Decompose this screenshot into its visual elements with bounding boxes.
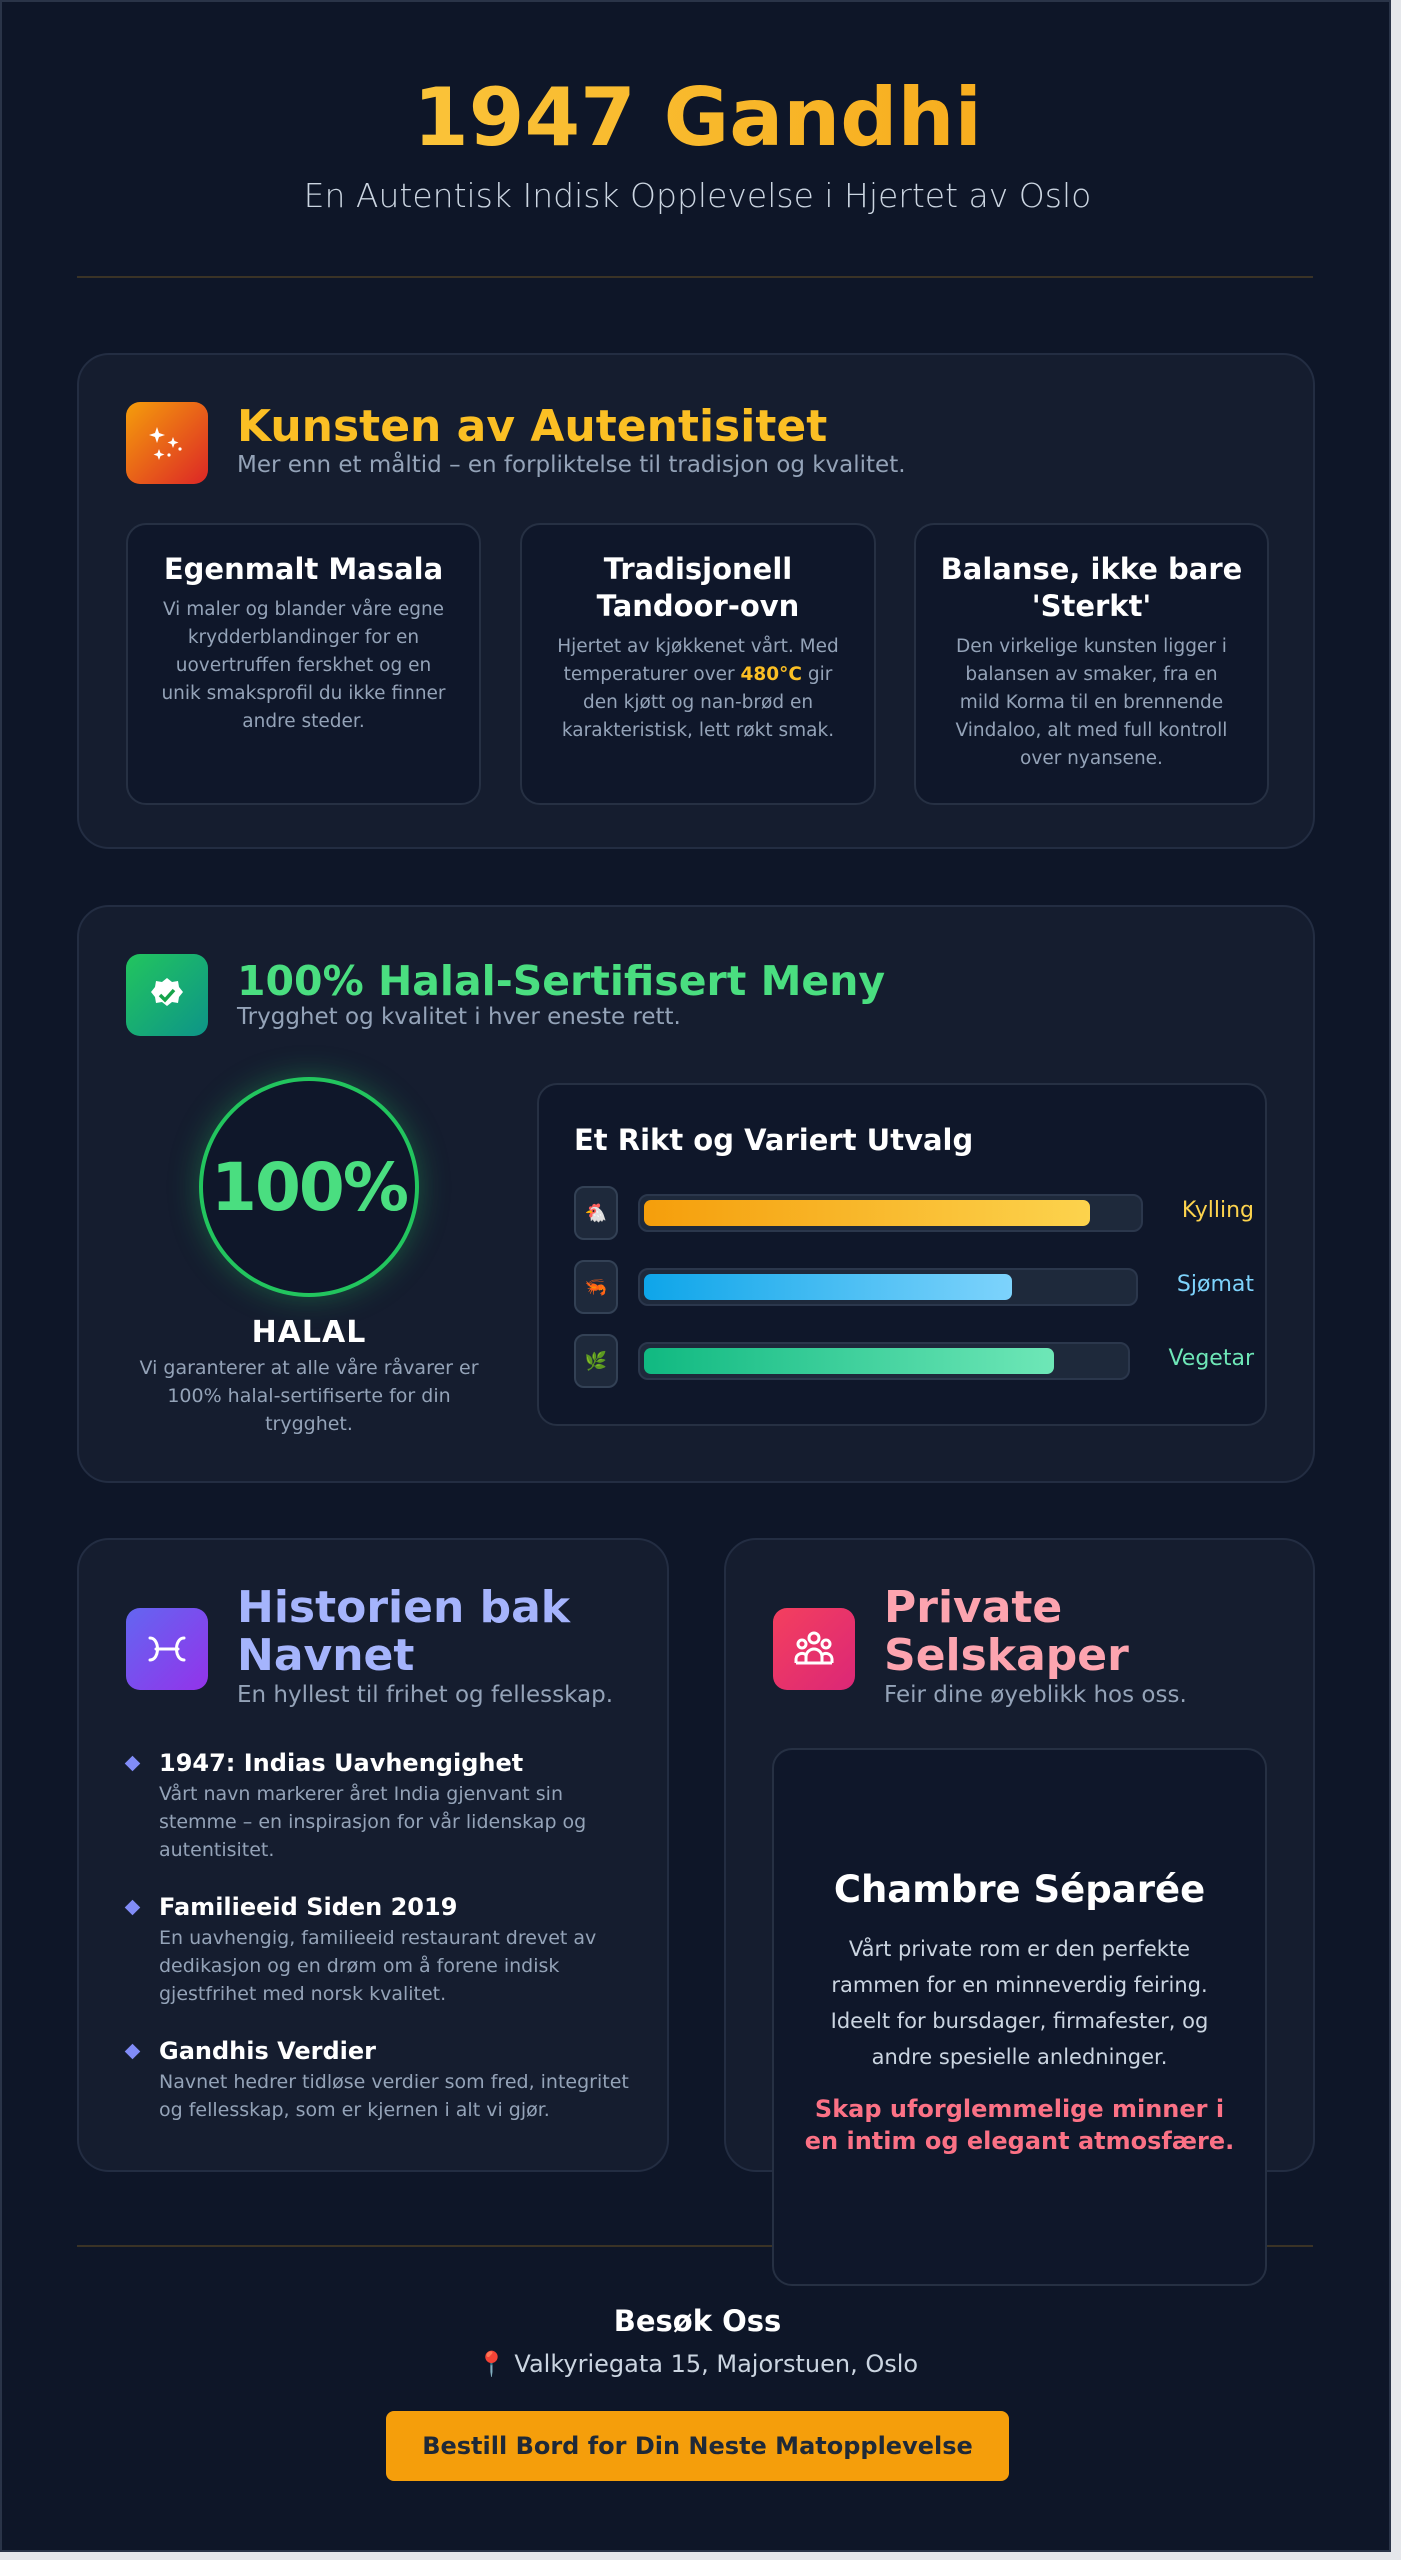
title [2,66,1393,170]
icon: group [773,1608,855,1690]
subtitle: En Autentisk Indisk Opplevelse i Hjertet av Oslo [304,176,1091,215]
heading: Navnet [237,1630,414,1681]
card: tandoor: Hjertet av kjøkkenet vårt. Med temperaturer over 480°C gir den kjøtt og nan-brød en karakteristisk, lett røkt smak. [557,636,839,741]
heading: Private [884,1582,1062,1633]
card: chambre separee: Skap uforglemmelige minner i en intim og elegant atmosfære. [805,2095,1234,2155]
card: chambre separee [772,1748,1267,2286]
bar: vegetar: Vegetar [1168,1346,1254,1371]
bar: kylling: Kylling [1182,1198,1254,1223]
halal label: HALAL [252,1315,366,1350]
bar: sjømat: 🦐 [585,1276,607,1296]
subheading: En hyllest til frihet og fellesskap. [237,1682,613,1708]
card: masala: Egenmalt Masala [164,552,443,586]
bar: vegetar [574,1334,1254,1388]
subheading: Trygghet og kvalitet i hver eneste rett. [237,1004,681,1030]
halal label: Vi garanterer at alle våre råvarer er 100% halal-sertifiserte for din trygghet. [139,1357,479,1435]
item: family [124,1893,596,2005]
bar chart [537,1083,1267,1426]
card: tandoor [520,523,876,805]
halal circle: 100% [211,1148,407,1226]
button: Bestill Bord for Din Neste Matopplevelse [422,2432,973,2460]
halal circle [199,1077,419,1297]
heading: Kunsten av Autentisitet [237,401,827,452]
panel: halal [77,905,1315,1483]
bar: sjømat [574,1260,1254,1314]
card: chambre separee: Vårt private rom er den perfekte rammen for en minneverdig feiring. Ideelt for bursdager, firmafester, og andre spesielle anledninger. [831,1937,1208,2069]
bar: kylling: 🐔 [585,1202,607,1222]
item: 1947: 1947: Indias Uavhengighet [159,1749,523,1777]
panel: private parties [724,1538,1315,2172]
heading: Selskaper [884,1630,1129,1681]
icon: badge check [126,954,208,1036]
icon: infinity [126,1608,208,1690]
item: 1947 [124,1749,586,1861]
card: tandoor: Tradisjonell Tandoor-ovn [597,552,799,623]
item: values: Gandhis Verdier [159,2037,376,2065]
subheading: Feir dine øyeblikk hos oss. [884,1682,1187,1708]
item: values: Navnet hedrer tidløse verdier som fred, integritet og fellesskap, som er kjernen i alt vi gjør. [159,2071,629,2121]
panel: history [77,1538,669,2172]
card: chambre separee: Chambre Séparée [834,1868,1205,1911]
bar: vegetar: 🌿 [585,1350,607,1370]
item: 1947: Vårt navn markerer året India gjenvant sin stemme – en inspirasjon for vår lidenskap og autentisitet. [159,1783,586,1861]
card: masala: Vi maler og blander våre egne krydderblandinger for en uovertruffen ferskhet og en unik smaksprofil du ikke finner andre steder. [161,599,446,732]
item: family: Familieeid Siden 2019 [159,1893,457,1921]
card: balance [914,523,1269,805]
chart title: Et Rikt og Variert Utvalg [574,1123,973,1157]
heading [237,1582,571,1681]
item: family: En uavhengig, familieeid restaurant drevet av dedikasjon og en drøm om å forene indisk gjestfrihet med norsk kvalitet. [159,1927,596,2005]
icon: sparkles [126,402,208,484]
subheading: Mer enn et måltid – en forpliktelse til tradisjon og kvalitet. [237,452,906,478]
item: values [124,2037,629,2121]
heading: Historien bak [237,1582,570,1633]
bar: kylling [574,1186,1254,1240]
heading: 100% Halal-Sertifisert Meny [237,957,885,1005]
button [386,2411,1009,2481]
footer: visit us: Besøk Oss [614,2304,781,2338]
halal label [139,1315,479,1435]
card: masala [126,523,481,805]
address: 📍 Valkyriegata 15, Majorstuen, Oslo [477,2350,918,2378]
heading [884,1582,1129,1681]
bar: sjømat: Sjømat [1177,1272,1254,1297]
panel: authenticity [77,353,1315,849]
card: balance: Den virkelige kunsten ligger i balansen av smaker, fra en mild Korma til en brennende Vindaloo, alt med full kontroll over nyansene. [956,636,1227,769]
card: balance: Balanse, ikke bare 'Sterkt' [941,552,1242,623]
